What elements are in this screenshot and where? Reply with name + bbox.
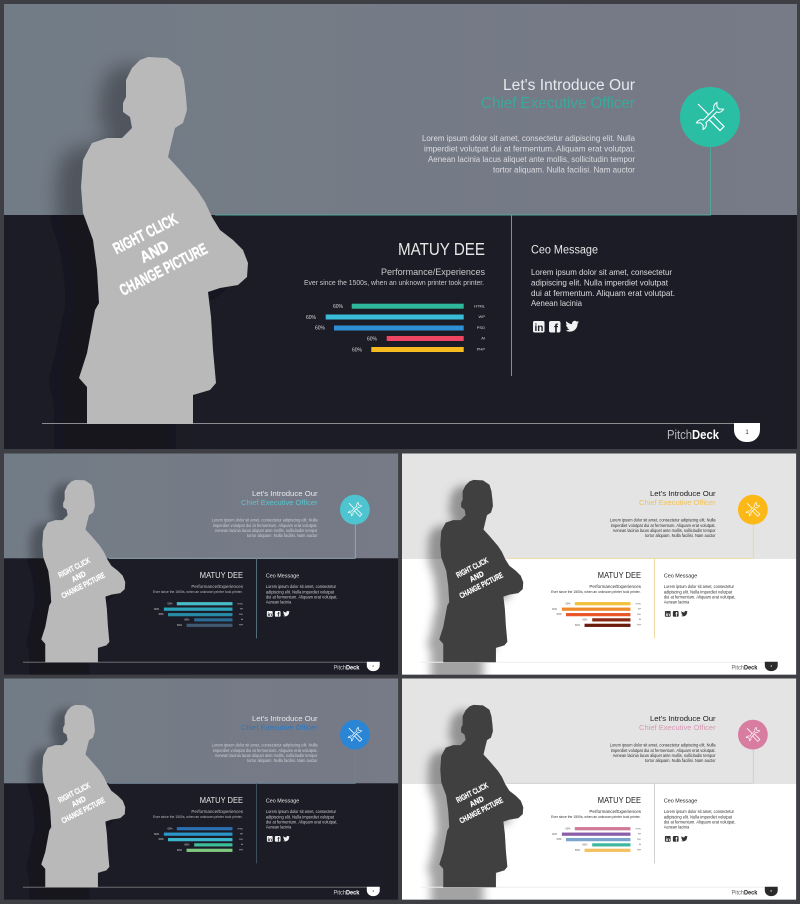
- heading: Chief Executive Officer: [241, 723, 318, 732]
- intro paragraph: [212, 743, 318, 763]
- bar chart: skills: PSD: [239, 614, 244, 616]
- intro paragraph: tortor aliquam. Nulla facilisi. Nam auctor: [247, 758, 318, 763]
- bar chart: skills: AI: [639, 843, 641, 846]
- slide top panel: [4, 678, 398, 783]
- page number tab: [765, 887, 778, 896]
- bar chart: skills: WP: [240, 609, 244, 611]
- bar chart: skills: AI: [241, 618, 243, 621]
- footer line: [421, 886, 765, 889]
- heading: Let's Introduce Our: [650, 714, 716, 723]
- logo: PitchDeck: PitchDeck: [732, 665, 758, 672]
- person name and role: Performance/Experiences: [589, 809, 642, 815]
- bar chart: skills: [306, 304, 486, 354]
- icons: social: f: [675, 613, 677, 619]
- bar chart: skills: 60%: [557, 838, 562, 841]
- bar chart: skills: PHP: [637, 850, 642, 852]
- icons: social: [665, 611, 688, 619]
- bar chart: skills: 60%: [575, 849, 581, 852]
- slide bottom panel: [4, 558, 398, 675]
- bar chart: skills: 60%: [333, 304, 344, 310]
- slide 2: cyan dark theme: [4, 453, 398, 694]
- silhouette placeholder picture: [41, 480, 125, 662]
- picture placeholder label: AND: [137, 238, 172, 267]
- person name and role: [153, 570, 244, 594]
- ceo message: Aenean lacinia: [664, 825, 690, 830]
- bar chart: skills: WP: [638, 609, 642, 611]
- intro paragraph: Lorem ipsum dolor sit amet, consectetur adipiscing elit. Nulla: [212, 518, 318, 523]
- silhouette placeholder picture: [439, 705, 523, 887]
- ceo message: Ceo Message: [266, 798, 299, 804]
- person name and role: MATUY DEE: [200, 570, 243, 580]
- intro paragraph: imperdiet volutpat dui at fermentum. Aliquam erat volutpat.: [213, 748, 318, 753]
- ceo message: dui at fermentum. Aliquam erat volutpat.: [664, 595, 735, 600]
- bar chart: skills: 60%: [566, 828, 571, 831]
- bar chart: skills: AI: [639, 618, 641, 621]
- logo: PitchDeck: PitchDeck: [732, 890, 758, 897]
- ceo message: Ceo Message: [266, 573, 299, 579]
- icons: social: in: [666, 612, 670, 618]
- ceo message: Aenean lacinia: [531, 298, 582, 308]
- picture placeholder label: CHANGE PICTURE: [60, 796, 107, 825]
- slide bottom panel: [4, 215, 797, 449]
- intro paragraph: imperdiet volutpat dui at fermentum. Aliquam erat volutpat.: [424, 144, 635, 154]
- ceo message: Ceo Message: [664, 573, 697, 579]
- ceo message: Lorem ipsum dolor sit amet, consectetur: [664, 584, 735, 589]
- heading: [241, 714, 318, 732]
- bar chart: skills: 60%: [557, 613, 562, 616]
- ceo message: Ceo Message: [664, 798, 697, 804]
- bar chart: skills: 60%: [552, 833, 558, 836]
- bar chart: skills: 60%: [154, 608, 160, 611]
- intro paragraph: [610, 518, 716, 538]
- bar chart: skills: 60%: [184, 844, 190, 847]
- intro paragraph: Lorem ipsum dolor sit amet, consectetur adipiscing elit. Nulla: [212, 743, 318, 748]
- icons: social: in: [268, 612, 272, 618]
- picture placeholder label: [449, 553, 505, 600]
- bar chart: skills: HTML: [238, 828, 244, 830]
- picture placeholder label: AND: [468, 794, 486, 809]
- footer line: [421, 661, 765, 664]
- ceo message: Aenean lacinia: [266, 825, 292, 830]
- picture placeholder label: CHANGE PICTURE: [60, 571, 107, 600]
- intro paragraph: imperdiet volutpat dui at fermentum. Aliquam erat volutpat.: [213, 523, 318, 528]
- intro paragraph: tortor aliquam. Nulla facilisi. Nam auctor: [645, 533, 716, 538]
- heading: Let's Introduce Our: [650, 489, 716, 498]
- ceo message: [531, 244, 675, 308]
- connector lines: [507, 750, 754, 863]
- intro paragraph: tortor aliquam. Nulla facilisi. Nam auctor: [247, 533, 318, 538]
- bar chart: skills: PHP: [239, 850, 244, 852]
- bar chart: skills: WP: [479, 314, 485, 319]
- bar chart: skills: 60%: [177, 624, 183, 627]
- icon: tools in circle: [738, 720, 768, 750]
- ceo message: adipiscing elit. Nulla imperdiet volutpat: [664, 814, 733, 819]
- ceo message: Aenean lacinia: [664, 600, 690, 605]
- bar chart: skills: 60%: [154, 833, 160, 836]
- slide bottom panel: [402, 558, 796, 675]
- picture placeholder label: [99, 205, 211, 300]
- person name and role: MATUY DEE: [200, 795, 243, 805]
- icons: social: f: [277, 613, 279, 619]
- bar chart: skills: 60%: [159, 613, 164, 616]
- heading: [481, 77, 635, 112]
- footer line: [23, 661, 367, 664]
- person name and role: Ever since the 1500s, when an unknown printer took printer.: [153, 815, 243, 819]
- person name and role: Ever since the 1500s, when an unknown printer took printer.: [304, 280, 484, 287]
- bar chart: skills: PSD: [477, 325, 485, 330]
- intro paragraph: Lorem ipsum dolor sit amet, consectetur adipiscing elit. Nulla: [422, 133, 635, 143]
- ceo message: Lorem ipsum dolor sit amet, consectetur: [664, 809, 735, 814]
- ceo message: dui at fermentum. Aliquam erat volutpat.: [266, 820, 337, 825]
- icons: social: in: [268, 837, 272, 843]
- bar chart: skills: 60%: [582, 619, 588, 622]
- intro paragraph: [610, 743, 716, 763]
- bar chart: skills: PHP: [637, 625, 642, 627]
- icon: tools in circle: [680, 87, 740, 147]
- bar chart: skills: 60%: [352, 348, 363, 354]
- intro paragraph: Lorem ipsum dolor sit amet, consectetur adipiscing elit. Nulla: [610, 518, 716, 523]
- picture placeholder label: RIGHT CLICK: [455, 781, 490, 805]
- picture placeholder label: RIGHT CLICK: [57, 556, 92, 580]
- picture placeholder label: RIGHT CLICK: [111, 211, 181, 258]
- picture placeholder label: CHANGE PICTURE: [117, 241, 211, 300]
- heading: [241, 489, 318, 507]
- heading: Let's Introduce Our: [252, 714, 318, 723]
- logo: PitchDeck: PitchDeck: [667, 427, 720, 442]
- slide top panel: [4, 4, 797, 215]
- bar chart: skills: WP: [240, 834, 244, 836]
- bar chart: skills: 60%: [552, 608, 558, 611]
- icon: tools in circle: [738, 495, 768, 525]
- connector lines: [109, 750, 356, 863]
- ceo message: Aenean lacinia: [266, 600, 292, 605]
- page number tab: 4: [372, 889, 374, 893]
- picture placeholder label: RIGHT CLICK: [57, 781, 92, 805]
- picture placeholder label: CHANGE PICTURE: [458, 796, 505, 825]
- slide 3: yellow light theme: [402, 453, 796, 696]
- page number tab: 2: [372, 664, 374, 668]
- connector lines: [109, 525, 356, 638]
- ceo message: dui at fermentum. Aliquam erat volutpat.: [664, 820, 735, 825]
- picture placeholder label: RIGHT CLICK: [455, 556, 490, 580]
- icons: social: [533, 321, 579, 336]
- bar chart: skills: HTML: [636, 603, 642, 605]
- bar chart: skills: 60%: [168, 603, 173, 606]
- slide 5: pink light theme: [402, 678, 796, 904]
- page number tab: [734, 423, 760, 442]
- bar chart: skills: PSD: [637, 614, 642, 616]
- intro paragraph: [212, 518, 318, 538]
- main slide: teal theme: [4, 4, 797, 488]
- ceo message: [266, 573, 337, 605]
- bar chart: skills: HTML: [238, 603, 244, 605]
- intro paragraph: Aenean lacinia lacus aliquet ante mollis, sollicitudin tempor: [613, 528, 716, 533]
- bar chart: skills: 60%: [566, 603, 571, 606]
- intro paragraph: Aenean lacinia lacus aliquet ante mollis, sollicitudin tempor: [215, 528, 318, 533]
- silhouette shadow: [26, 706, 85, 900]
- icons: social: [267, 611, 290, 619]
- heading: Chief Executive Officer: [241, 498, 318, 507]
- heading: Chief Executive Officer: [639, 723, 716, 732]
- bar chart: skills: AI: [481, 336, 485, 340]
- page number tab: 5: [770, 889, 772, 893]
- silhouette placeholder picture: [41, 705, 125, 887]
- person name and role: Ever since the 1500s, when an unknown printer took printer.: [551, 590, 641, 594]
- footer line: [42, 423, 734, 424]
- bar chart: skills: [154, 602, 244, 627]
- silhouette placeholder picture: [79, 57, 248, 424]
- picture placeholder label: CHANGE PICTURE: [458, 571, 505, 600]
- page number tab: 1: [745, 430, 749, 436]
- slide bottom panel: [4, 783, 398, 900]
- icons: social: in: [666, 837, 670, 843]
- page number tab: [765, 662, 778, 671]
- ceo message: Lorem ipsum dolor sit amet, consectetur: [531, 267, 672, 277]
- bar chart: skills: 60%: [159, 838, 164, 841]
- bar chart: skills: 60%: [306, 315, 317, 321]
- icons: social: in: [534, 323, 543, 334]
- intro paragraph: [422, 133, 635, 174]
- intro paragraph: Aenean lacinia lacus aliquet ante mollis, sollicitudin tempor: [428, 154, 635, 164]
- picture placeholder label: AND: [468, 569, 486, 584]
- intro paragraph: tortor aliquam. Nulla facilisi. Nam auctor: [645, 758, 716, 763]
- ceo message: [664, 573, 735, 605]
- bar chart: skills: HTML: [636, 828, 642, 830]
- heading: Chief Executive Officer: [639, 498, 716, 507]
- ceo message: dui at fermentum. Aliquam erat volutpat.: [266, 595, 337, 600]
- picture placeholder label: [449, 778, 505, 825]
- ceo message: Lorem ipsum dolor sit amet, consectetur: [266, 809, 337, 814]
- ceo message: adipiscing elit. Nulla imperdiet volutpat: [531, 278, 669, 288]
- intro paragraph: Aenean lacinia lacus aliquet ante mollis, sollicitudin tempor: [215, 753, 318, 758]
- bar chart: skills: [552, 827, 642, 852]
- ceo message: adipiscing elit. Nulla imperdiet volutpat: [266, 814, 335, 819]
- bar chart: skills: AI: [241, 843, 243, 846]
- bar chart: skills: PHP: [477, 346, 485, 352]
- bar chart: skills: HTML: [474, 304, 486, 308]
- picture placeholder label: [51, 778, 107, 825]
- silhouette shadow: [427, 486, 511, 696]
- icons: social: f: [277, 838, 279, 844]
- bar chart: skills: 60%: [582, 844, 588, 847]
- icons: social: f: [675, 838, 677, 844]
- heading: Let's Introduce Our: [252, 489, 318, 498]
- ceo message: dui at fermentum. Aliquam erat volutpat.: [531, 288, 675, 298]
- page number tab: 3: [770, 664, 772, 668]
- person name and role: Performance/Experiences: [191, 584, 244, 590]
- logo: PitchDeck: PitchDeck: [334, 890, 360, 897]
- heading: Chief Executive Officer: [481, 95, 635, 112]
- slide bottom panel: [402, 783, 796, 900]
- picture placeholder label: AND: [70, 794, 88, 809]
- logo: PitchDeck: PitchDeck: [334, 665, 360, 672]
- slide top panel: [402, 678, 796, 783]
- ceo message: [266, 798, 337, 830]
- icons: social: [665, 836, 688, 844]
- intro paragraph: imperdiet volutpat dui at fermentum. Aliquam erat volutpat.: [611, 523, 716, 528]
- icons: social: f: [554, 322, 559, 336]
- picture placeholder label: AND: [70, 569, 88, 584]
- bar chart: skills: 60%: [177, 849, 183, 852]
- silhouette shadow: [427, 711, 511, 904]
- bar chart: skills: [552, 602, 642, 627]
- heading: Let's Introduce Our: [503, 77, 635, 94]
- heading: [639, 714, 716, 732]
- person name and role: MATUY DEE: [598, 570, 641, 580]
- person name and role: Performance/Experiences: [589, 584, 642, 590]
- bar chart: skills: [154, 827, 244, 852]
- ceo message: Ceo Message: [531, 244, 598, 256]
- person name and role: [153, 795, 244, 819]
- icons: social: [267, 836, 290, 844]
- bar chart: skills: PHP: [239, 625, 244, 627]
- silhouette shadow: [49, 58, 166, 449]
- person name and role: Performance/Experiences: [381, 267, 485, 278]
- heading: [639, 489, 716, 507]
- page number tab: [367, 887, 380, 896]
- ceo message: adipiscing elit. Nulla imperdiet volutpat: [664, 589, 733, 594]
- slide 4: blue dark theme: [4, 678, 398, 904]
- ceo message: [664, 798, 735, 830]
- silhouette shadow: [26, 480, 85, 674]
- bar chart: skills: WP: [638, 834, 642, 836]
- icon: tools in circle: [340, 495, 370, 525]
- icon: tools in circle: [340, 720, 370, 750]
- connector lines: [215, 147, 711, 376]
- silhouette placeholder picture: [439, 480, 523, 662]
- intro paragraph: imperdiet volutpat dui at fermentum. Aliquam erat volutpat.: [611, 748, 716, 753]
- person name and role: [551, 570, 642, 594]
- person name and role: MATUY DEE: [598, 795, 641, 805]
- slide top panel: [402, 453, 796, 558]
- person name and role: Ever since the 1500s, when an unknown printer took printer.: [153, 590, 243, 594]
- person name and role: [304, 239, 485, 287]
- bar chart: skills: 60%: [575, 624, 581, 627]
- slide top panel: [4, 453, 398, 558]
- bar chart: skills: 60%: [315, 326, 326, 332]
- ceo message: Lorem ipsum dolor sit amet, consectetur: [266, 584, 337, 589]
- intro paragraph: tortor aliquam. Nulla facilisi. Nam auctor: [493, 164, 635, 174]
- person name and role: [551, 795, 642, 819]
- bar chart: skills: PSD: [239, 839, 244, 841]
- bar chart: skills: 60%: [367, 336, 378, 342]
- person name and role: Performance/Experiences: [191, 809, 244, 815]
- footer line: [23, 886, 367, 889]
- connector lines: [507, 525, 754, 638]
- intro paragraph: Lorem ipsum dolor sit amet, consectetur adipiscing elit. Nulla: [610, 743, 716, 748]
- bar chart: skills: 60%: [184, 619, 190, 622]
- person name and role: Ever since the 1500s, when an unknown printer took printer.: [551, 815, 641, 819]
- person name and role: MATUY DEE: [398, 239, 485, 259]
- bar chart: skills: PSD: [637, 839, 642, 841]
- intro paragraph: Aenean lacinia lacus aliquet ante mollis, sollicitudin tempor: [613, 753, 716, 758]
- bar chart: skills: 60%: [168, 828, 173, 831]
- ceo message: adipiscing elit. Nulla imperdiet volutpat: [266, 589, 335, 594]
- page number tab: [367, 662, 380, 671]
- picture placeholder label: [51, 553, 107, 600]
